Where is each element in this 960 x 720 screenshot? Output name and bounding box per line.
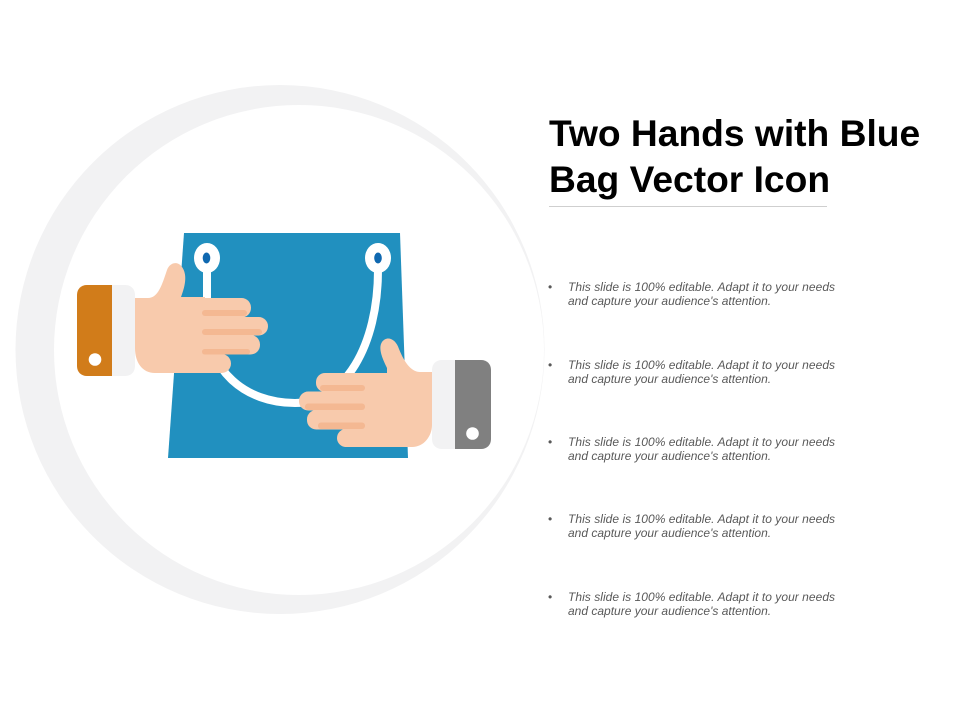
bullet 3: and capture your audience's attention. bbox=[568, 449, 771, 463]
bullet 3: • bbox=[548, 435, 552, 449]
right sleeve button bbox=[466, 427, 479, 440]
right palm and thumb bbox=[345, 338, 432, 447]
left orange sleeve bbox=[77, 285, 112, 376]
bullet 3 bbox=[548, 435, 835, 463]
bullet 1: • bbox=[548, 280, 552, 294]
bullet 4 bbox=[548, 512, 835, 540]
left finger creases bbox=[202, 310, 262, 354]
bullet 4: • bbox=[548, 512, 552, 526]
bullet 1: This slide is 100% editable. Adapt it to your needs bbox=[568, 280, 835, 294]
title: Bag Vector Icon bbox=[549, 158, 830, 200]
right finger creases bbox=[305, 385, 365, 429]
left palm and thumb bbox=[135, 263, 205, 373]
right white cuff bbox=[432, 360, 455, 449]
bag handle bbox=[207, 270, 378, 403]
bullet 4: This slide is 100% editable. Adapt it to your needs bbox=[568, 512, 835, 526]
title: Two Hands with Blue bbox=[549, 112, 920, 154]
bullet 2: This slide is 100% editable. Adapt it to your needs bbox=[568, 358, 835, 372]
bullet 5: • bbox=[548, 590, 552, 604]
title bbox=[549, 112, 920, 200]
right hand bbox=[299, 338, 491, 449]
bullet 2: and capture your audience's attention. bbox=[568, 372, 771, 386]
right grey sleeve bbox=[455, 360, 491, 449]
bullet 5: and capture your audience's attention. bbox=[568, 604, 771, 618]
left eyelet bbox=[194, 243, 220, 273]
left white cuff bbox=[112, 285, 135, 376]
bullet 5 bbox=[548, 590, 835, 618]
bullet 5: This slide is 100% editable. Adapt it to your needs bbox=[568, 590, 835, 604]
right fingers bbox=[299, 373, 387, 447]
bullet 2 bbox=[548, 358, 835, 386]
bullet 1: and capture your audience's attention. bbox=[568, 294, 771, 308]
bullet 2: • bbox=[548, 358, 552, 372]
left hand bbox=[77, 263, 268, 376]
left sleeve button bbox=[89, 353, 101, 366]
left fingers bbox=[180, 298, 268, 373]
blue bag bbox=[168, 233, 408, 458]
bullet 4: and capture your audience's attention. bbox=[568, 526, 771, 540]
background ring bbox=[16, 85, 544, 614]
bullet 1 bbox=[548, 280, 835, 308]
right eyelet bbox=[365, 243, 391, 273]
bullet 3: This slide is 100% editable. Adapt it to your needs bbox=[568, 435, 835, 449]
